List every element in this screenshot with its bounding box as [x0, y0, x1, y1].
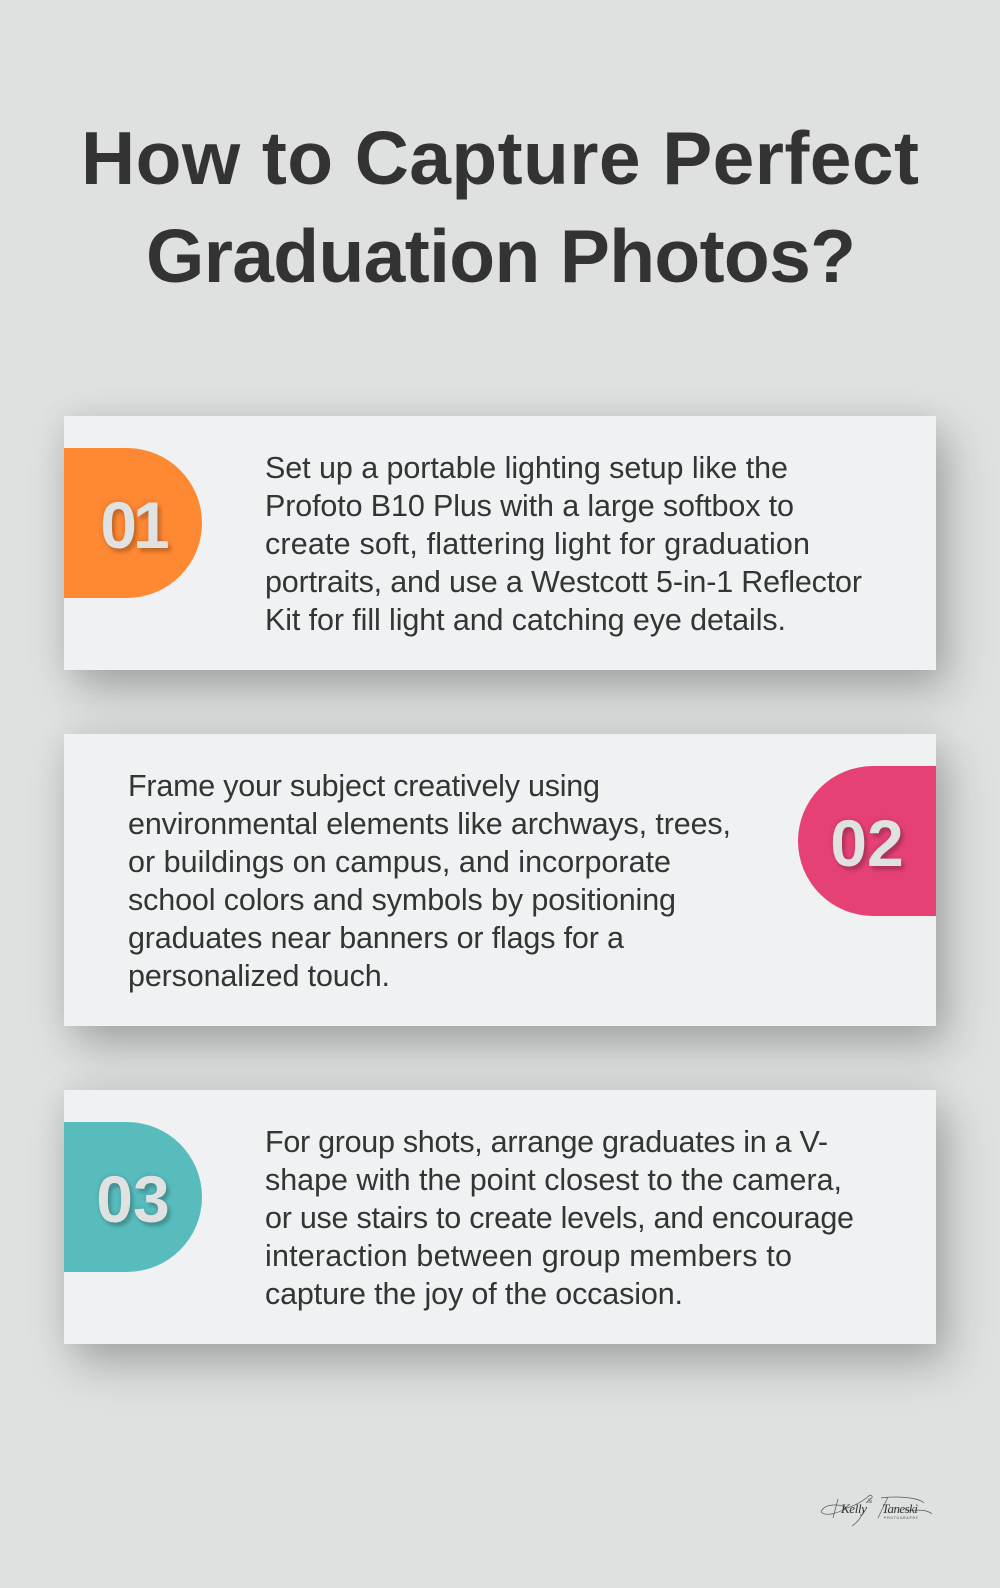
logo: signature: PHOTOGRAPHY	[884, 1516, 919, 1520]
panel: step 01	[64, 416, 936, 670]
text block: step 03: or use stairs to create levels, and encourage	[265, 1201, 854, 1235]
title: Graduation Photos?	[146, 214, 856, 298]
text block: step 01: create soft, flattering light for graduation	[265, 527, 810, 561]
text block: step 03	[265, 1125, 854, 1311]
text block: step 02: school colors and symbols by positioning	[128, 883, 676, 917]
title	[81, 116, 919, 298]
badge: 03: 03	[96, 1162, 170, 1236]
text block: step 03: capture the joy of the occasion.	[265, 1277, 683, 1311]
logo: signature: Taneski	[882, 1501, 918, 1516]
badge: 01	[64, 448, 202, 598]
panel: step 02	[64, 734, 936, 1026]
logo: signature: &	[867, 1497, 873, 1505]
text block: step 01: portraits, and use a Westcott 5-in-1 Reflector	[265, 565, 862, 599]
text block: step 03: shape with the point closest to the camera,	[265, 1163, 842, 1197]
text block: step 01	[265, 451, 862, 637]
text block: step 02	[128, 769, 731, 993]
panel: step 03	[64, 1090, 936, 1344]
logo: signature: Kelly	[840, 1501, 867, 1516]
text block: step 02: or buildings on campus, and incorporate	[128, 845, 671, 879]
text block: step 03: For group shots, arrange graduates in a V-	[265, 1125, 828, 1159]
text block: step 02: environmental elements like archways, trees,	[128, 807, 731, 841]
badge: 01: 01	[100, 488, 166, 562]
text block: step 02: Frame your subject creatively using	[128, 769, 600, 803]
title: How to Capture Perfect	[81, 116, 919, 200]
badge: 02	[798, 766, 936, 916]
text block: step 02: personalized touch.	[128, 959, 390, 993]
text block: step 01: Kit for fill light and catching eye details.	[265, 603, 786, 637]
text block: step 03: interaction between group members to	[265, 1239, 792, 1273]
text block: step 02: graduates near banners or flags for a	[128, 921, 624, 955]
text block: step 01: Set up a portable lighting setup like the	[265, 451, 788, 485]
badge: 03	[64, 1122, 202, 1272]
text block: step 01: Profoto B10 Plus with a large softbox to	[265, 489, 794, 523]
badge: 02: 02	[830, 806, 904, 880]
